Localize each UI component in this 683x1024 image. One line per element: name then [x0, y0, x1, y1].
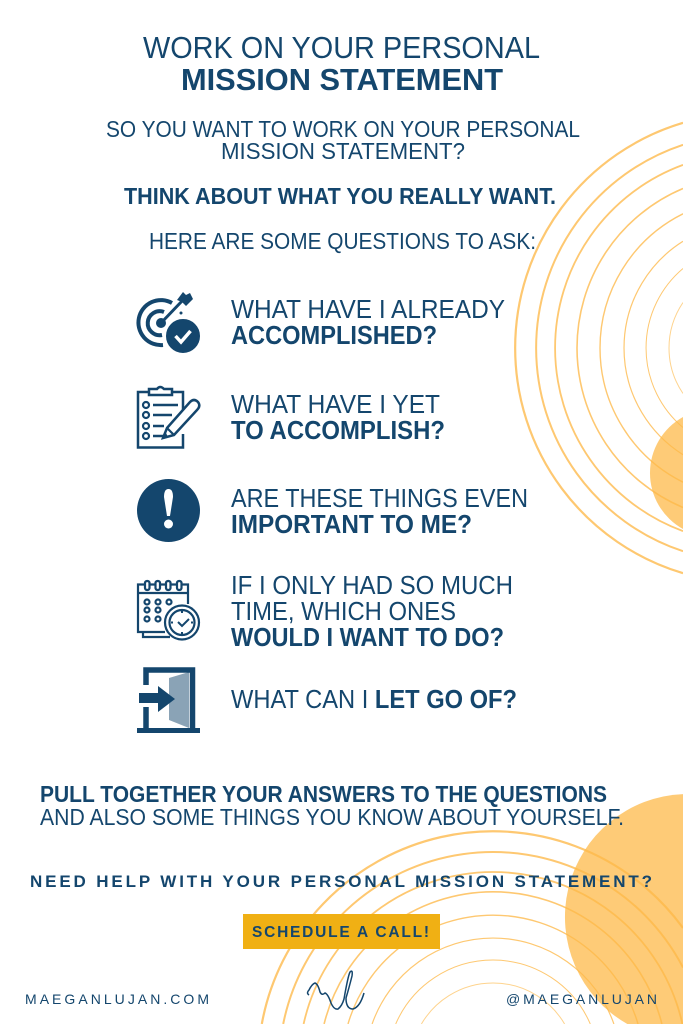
icon: calendar and clock — [138, 581, 199, 640]
intro text — [106, 116, 580, 164]
logo: signature — [308, 971, 364, 1009]
question 1: ACCOMPLISHED? — [231, 322, 437, 350]
decoration: bottom concentric circles — [262, 831, 683, 1024]
question 1: WHAT HAVE I ALREADY — [231, 296, 505, 324]
subheading: THINK ABOUT WHAT YOU REALLY WANT. — [124, 183, 556, 209]
button: schedule a call — [243, 914, 440, 949]
intro text: SO YOU WANT TO WORK ON YOUR PERSONAL — [106, 116, 580, 142]
call to action heading: NEED HELP WITH YOUR PERSONAL MISSION STATEMENT? — [30, 872, 652, 891]
closing text: AND ALSO SOME THINGS YOU KNOW ABOUT YOURSELF. — [40, 804, 624, 830]
question 2: TO ACCOMPLISH? — [231, 417, 445, 445]
intro text: MISSION STATEMENT? — [221, 138, 465, 164]
icon: target with check — [138, 292, 201, 354]
question 4 — [231, 572, 513, 652]
closing text — [40, 781, 624, 830]
decoration: right filled circle — [650, 417, 683, 529]
decoration: top right concentric circles — [515, 123, 683, 573]
question 3: IMPORTANT TO ME? — [231, 511, 472, 539]
icon: clipboard and pencil — [138, 387, 199, 448]
question 1 — [231, 296, 505, 350]
footer website: MAEGANLUJAN.COM — [25, 991, 209, 1007]
question 5: WHAT CAN I LET GO OF? — [231, 686, 517, 714]
decoration: bottom right filled circle — [565, 794, 683, 1024]
button: schedule a call: SCHEDULE A CALL! — [252, 924, 429, 941]
title: MISSION STATEMENT — [181, 62, 503, 97]
closing text: PULL TOGETHER YOUR ANSWERS TO THE QUESTIONS — [40, 781, 607, 807]
title: WORK ON YOUR PERSONAL — [143, 30, 540, 65]
question 2 — [231, 391, 445, 445]
icon: exclamation mark — [137, 479, 200, 542]
question 4: TIME, WHICH ONES — [231, 598, 456, 626]
question 2: WHAT HAVE I YET — [231, 391, 440, 419]
title — [143, 30, 540, 97]
icon: door with arrow — [137, 670, 200, 733]
footer handle: @MAEGANLUJAN — [506, 991, 657, 1007]
question 3: ARE THESE THINGS EVEN — [231, 485, 528, 513]
question 3 — [231, 485, 528, 539]
question 4: WOULD I WANT TO DO? — [231, 624, 504, 652]
question 4: IF I ONLY HAD SO MUCH — [231, 572, 513, 600]
lead-in text: HERE ARE SOME QUESTIONS TO ASK: — [149, 228, 536, 254]
